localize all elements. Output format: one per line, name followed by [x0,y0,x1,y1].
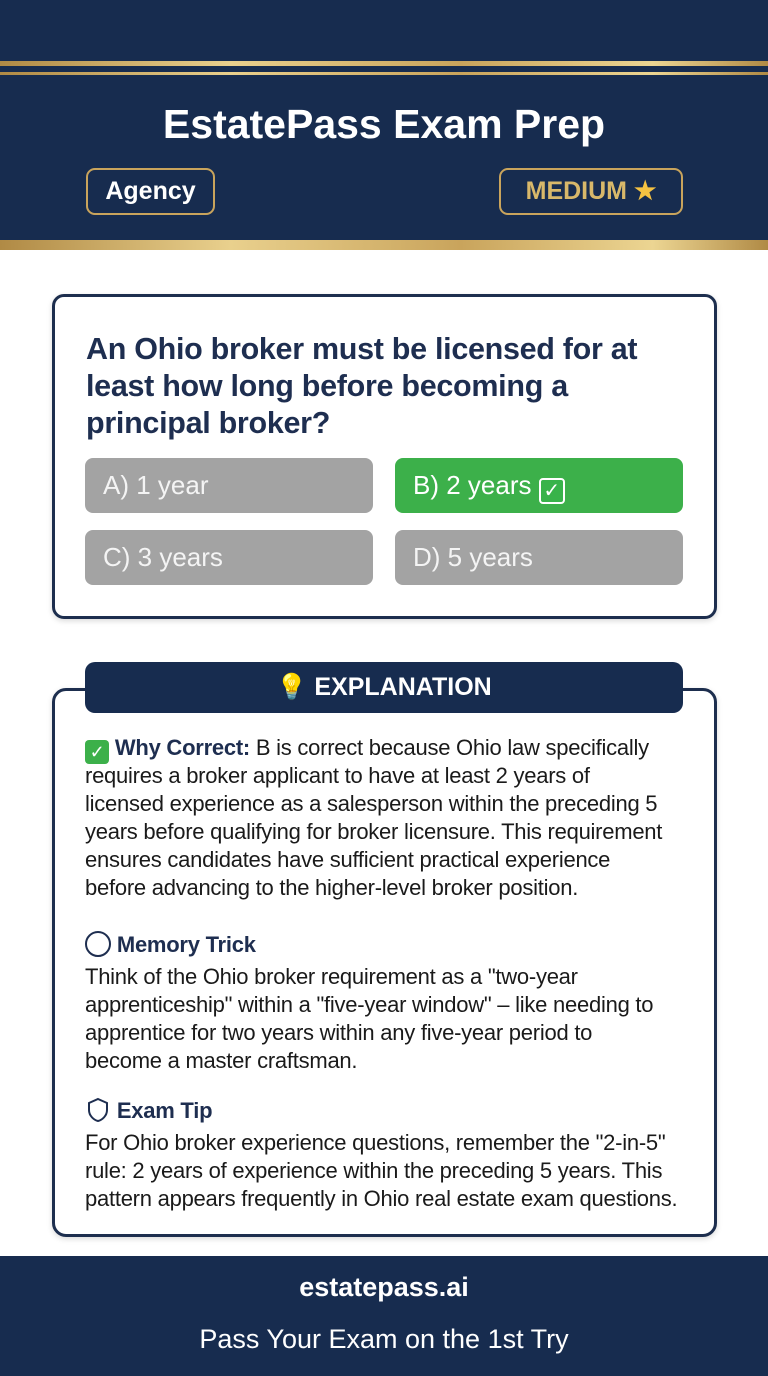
option B correct [395,458,683,513]
memory trick: become a master craftsman. [85,1048,357,1073]
option A [85,458,373,513]
option C [85,530,373,585]
badge: difficulty [499,168,683,215]
option B correct: B) 2 years [413,470,532,500]
memory trick: Memory Trick [117,932,256,957]
footer [0,1256,768,1376]
exam tip: For Ohio broker experience questions, remember the "2-in-5" [85,1130,665,1155]
memory trick [85,931,653,1073]
question text: least how long before becoming a [86,369,568,403]
option C: C) 3 years [103,542,223,572]
exam tip [85,1098,677,1211]
memory trick: apprentice for two years within any five-year period to [85,1020,592,1045]
question card [52,294,717,619]
why correct: ✓ [90,742,104,762]
why correct: Why Correct: B is correct because Ohio law specifically [115,735,649,760]
footer: estatepass.ai [299,1272,469,1302]
footer: Pass Your Exam on the 1st Try [199,1324,569,1354]
question text: principal broker? [86,406,330,440]
question text [86,332,638,440]
memory trick: Think of the Ohio broker requirement as a "two-year [85,964,578,989]
badge: category [86,168,215,215]
option D: D) 5 years [413,542,533,572]
exam tip: rule: 2 years of experience within the preceding 5 years. This [85,1158,662,1183]
question text: An Ohio broker must be licensed for at [86,332,637,366]
header [0,0,768,250]
option A: A) 1 year [103,470,208,500]
why correct: ensures candidates have sufficient practical experience [85,847,610,872]
explanation panel [52,688,717,1237]
why correct: requires a broker applicant to have at least 2 years of [85,763,590,788]
explanation header: 💡 EXPLANATION [276,673,492,701]
title: EstatePass Exam Prep [163,101,605,147]
memory trick: apprenticeship" within a "five-year window" – like needing to [85,992,653,1017]
why correct [85,735,662,900]
why correct: before advancing to the higher-level broker position. [85,875,578,900]
exam tip: Exam Tip [117,1098,212,1123]
option D [395,530,683,585]
why correct: licensed experience as a salesperson within the preceding 5 [85,791,657,816]
why correct: years before qualifying for broker licensure. This requirement [85,819,662,844]
exam tip: pattern appears frequently in Ohio real estate exam questions. [85,1186,677,1211]
badge: difficulty: MEDIUM ★ [526,177,656,205]
option B correct: ✓ [543,480,560,502]
badge: category: Agency [105,177,196,205]
explanation header [85,662,683,713]
